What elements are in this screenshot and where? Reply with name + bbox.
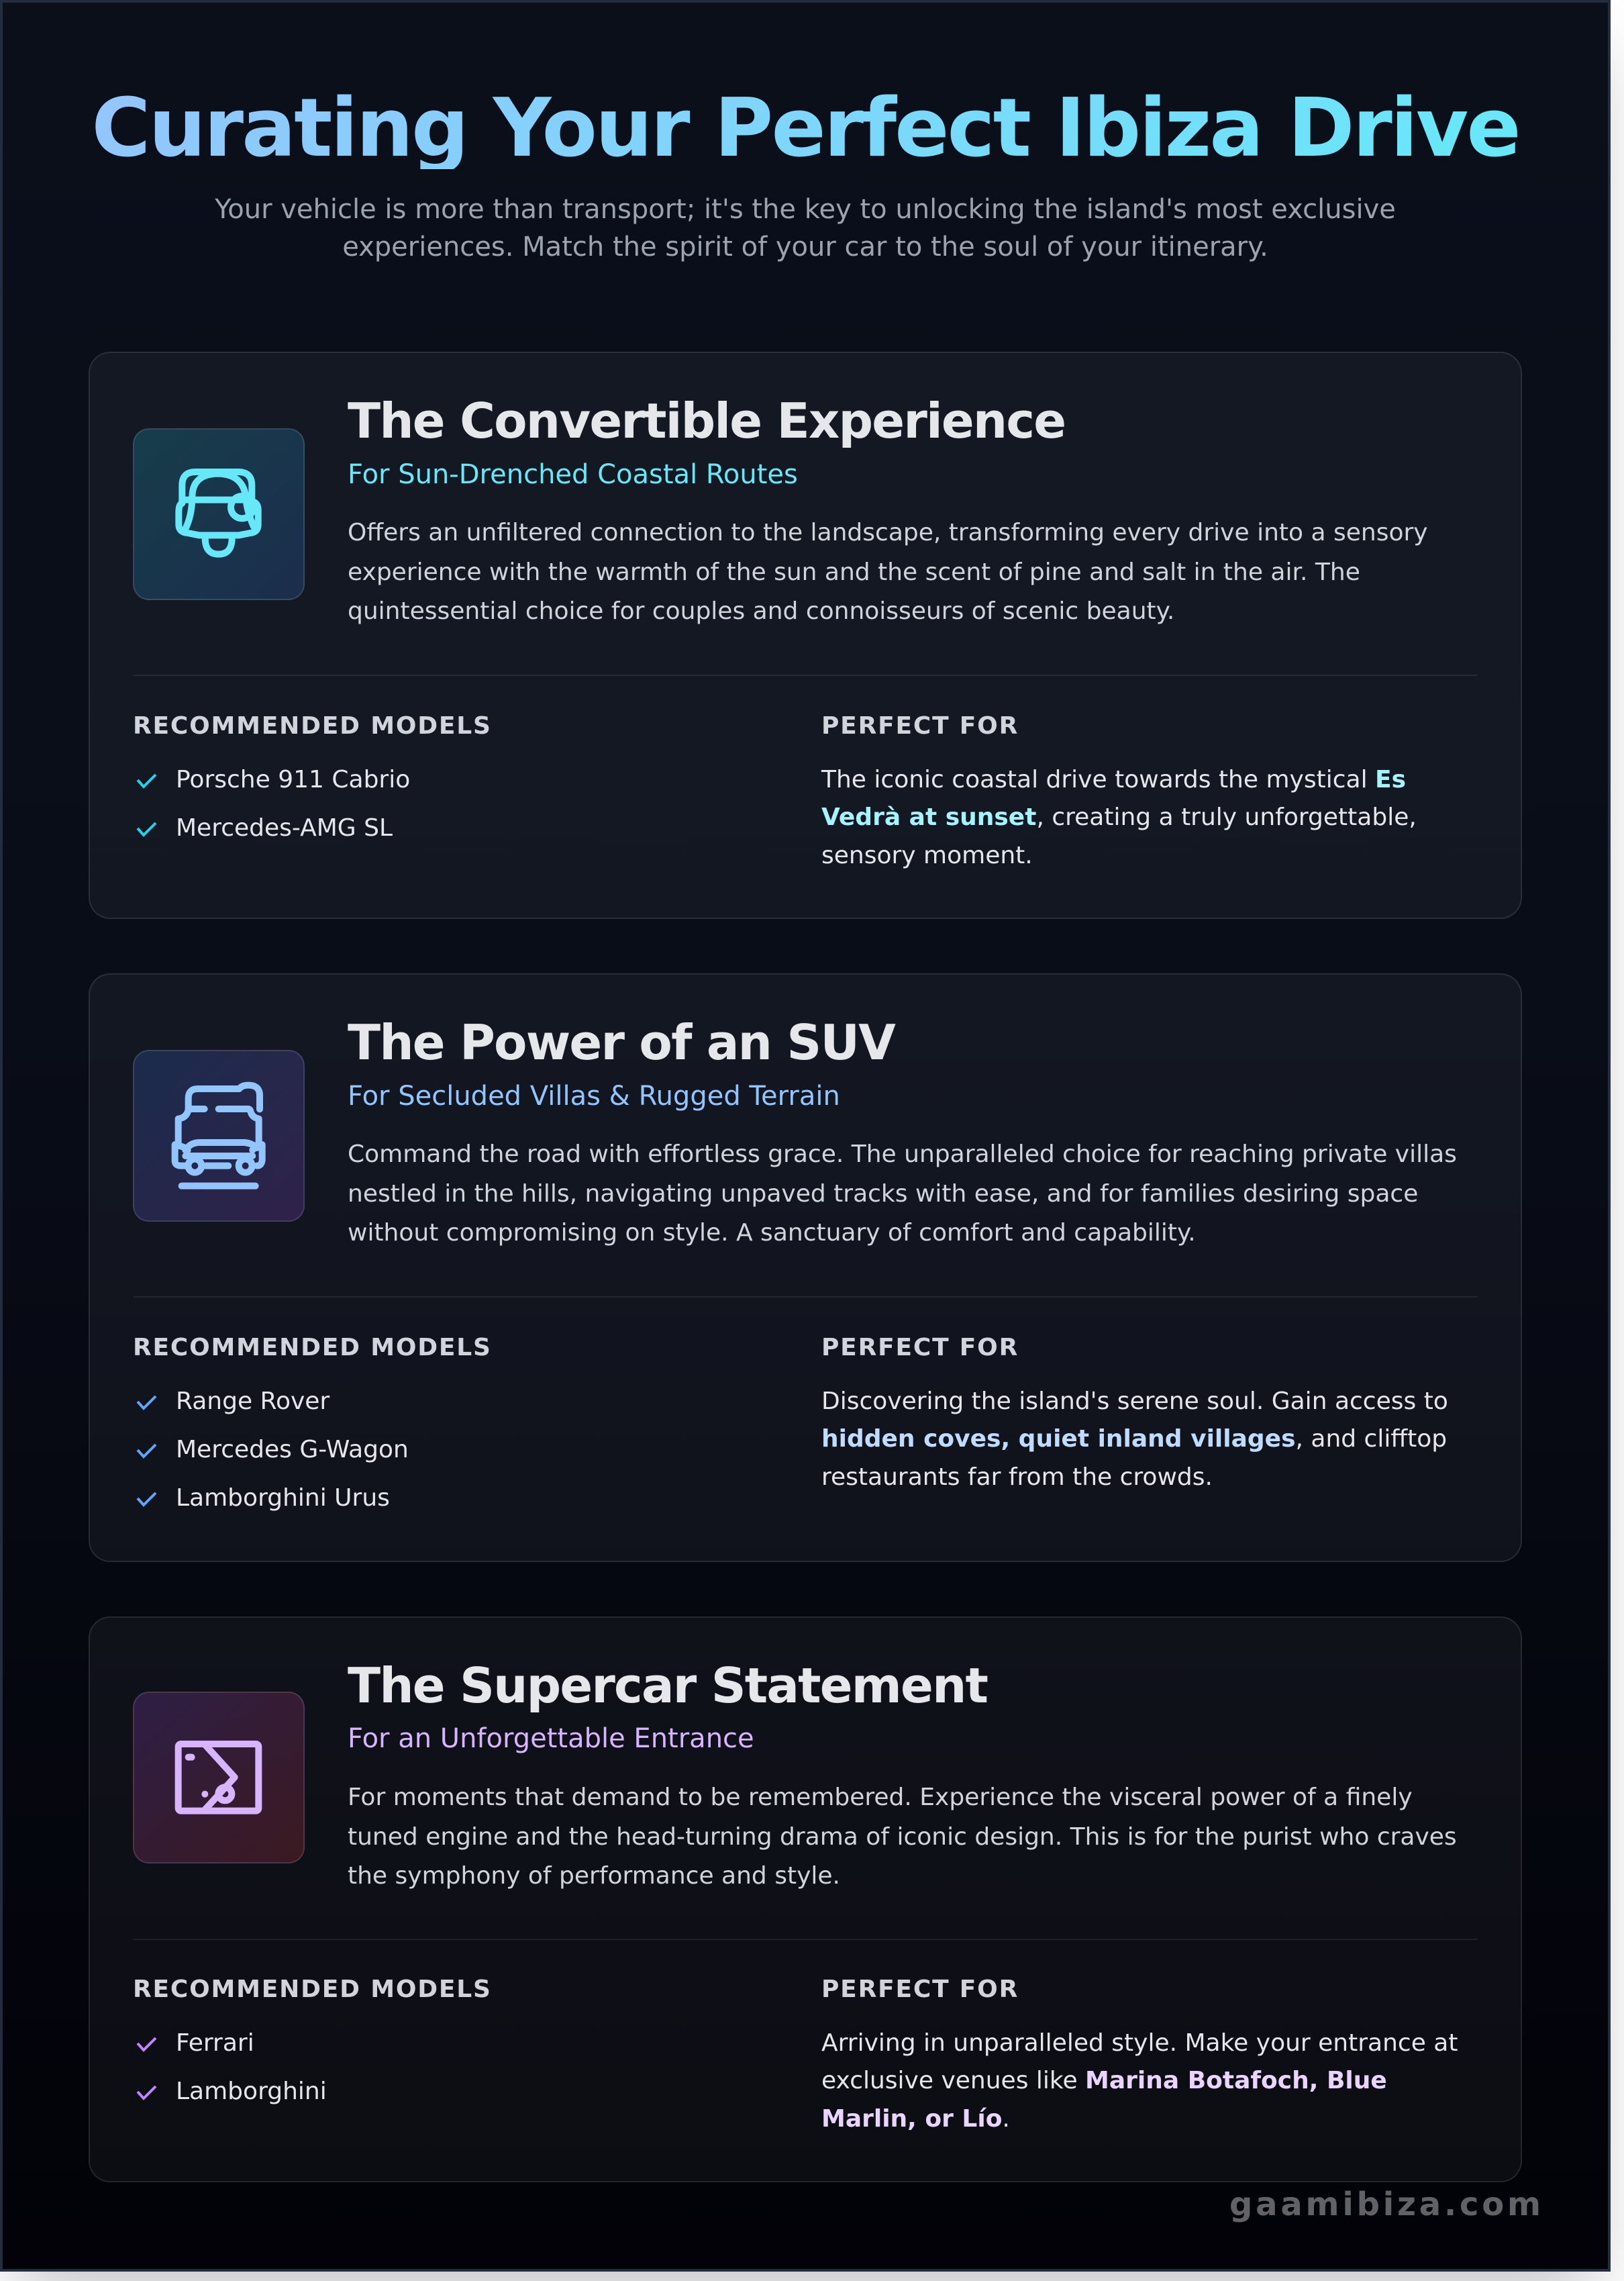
list item: Ferrari (176, 2029, 254, 2057)
description: quintessential choice for couples and connoisseurs of scenic beauty. (348, 597, 1174, 625)
title: Curating Your Perfect Ibiza Drive (91, 82, 1519, 175)
list item: Mercedes-AMG SL (176, 814, 393, 842)
list item: Lamborghini (176, 2078, 327, 2105)
list item: Range Rover (176, 1388, 329, 1415)
text: perfect for (821, 1388, 1448, 1491)
text: perfect for: Arriving in unparalleled style. Make your entrance at (821, 2029, 1458, 2057)
description: tuned engine and the head-turning drama of iconic design. This is for the purist who craves (348, 1823, 1457, 1850)
description (348, 1140, 1457, 1247)
heading: The Convertible Experience (348, 393, 1065, 449)
text: perfect for: hidden coves, quiet inland villages, and clifftop (821, 1425, 1447, 1453)
description: Offers an unfiltered connection to the landscape, transforming every drive into a sensory (348, 519, 1428, 546)
label: perfect for: PERFECT FOR (821, 1334, 1019, 1361)
description: For moments that demand to be remembered. Experience the visceral power of a finely (348, 1784, 1413, 1811)
icon: supercar (133, 1692, 305, 1863)
watermark: gaamibiza.com (1229, 2186, 1544, 2223)
list: recommended models (137, 766, 410, 842)
label: perfect for: PERFECT FOR (821, 1976, 1019, 2003)
description: nestled in the hills, navigating unpaved tracks with ease, and for families desiring space (348, 1180, 1418, 1207)
description: without compromising on style. A sanctuary of comfort and capability. (348, 1219, 1196, 1247)
description: Command the road with effortless grace. The unparalleled choice for reaching private villas (348, 1140, 1457, 1168)
subtitle (215, 194, 1396, 262)
text: perfect for (821, 2029, 1458, 2133)
panel: supercar (89, 1616, 1522, 2182)
list: recommended models (137, 2029, 327, 2105)
text: perfect for: The iconic coastal drive towards the mystical Es (821, 766, 1406, 793)
description (348, 1784, 1457, 1890)
icon: suv (133, 1050, 305, 1222)
text: perfect for: restaurants far from the crowds. (821, 1463, 1213, 1491)
subheading: For Sun-Drenched Coastal Routes (348, 459, 798, 490)
list: recommended models (137, 1388, 409, 1512)
list item (137, 2029, 254, 2057)
list item: Mercedes G-Wagon (176, 1436, 409, 1463)
text: perfect for: sensory moment. (821, 842, 1033, 869)
subheading: For an Unforgettable Entrance (348, 1723, 754, 1754)
description: the symphony of performance and style. (348, 1862, 840, 1890)
text: perfect for: Vedrà at sunset, creating a truly unforgettable, (821, 804, 1417, 831)
text: perfect for: Marlin, or Lío. (821, 2105, 1010, 2133)
panel: suv (89, 973, 1522, 1562)
label: recommended models: RECOMMENDED MODELS (133, 1334, 492, 1361)
text: perfect for: Discovering the island's serene soul. Gain access to (821, 1388, 1448, 1415)
icon: convertible (133, 428, 305, 600)
description (348, 519, 1428, 625)
subheading: For Secluded Villas & Rugged Terrain (348, 1081, 840, 1112)
list item: Porsche 911 Cabrio (176, 766, 410, 793)
heading: The Power of an SUV (348, 1014, 895, 1071)
subtitle: experiences. Match the spirit of your car to the soul of your itinerary. (342, 232, 1268, 262)
panel: convertible (89, 352, 1522, 919)
text: perfect for (821, 766, 1417, 869)
label: recommended models: RECOMMENDED MODELS (133, 1976, 492, 2003)
heading: The Supercar Statement (348, 1657, 987, 1714)
list item: Lamborghini Urus (176, 1484, 390, 1512)
label: perfect for: PERFECT FOR (821, 712, 1019, 740)
description: experience with the warmth of the sun and the scent of pine and salt in the air. The (348, 559, 1360, 585)
label: recommended models: RECOMMENDED MODELS (133, 712, 492, 740)
text: perfect for: exclusive venues like Marina Botafoch, Blue (821, 2067, 1387, 2094)
subtitle: Your vehicle is more than transport; it's the key to unlocking the island's most exclusive (215, 194, 1396, 225)
